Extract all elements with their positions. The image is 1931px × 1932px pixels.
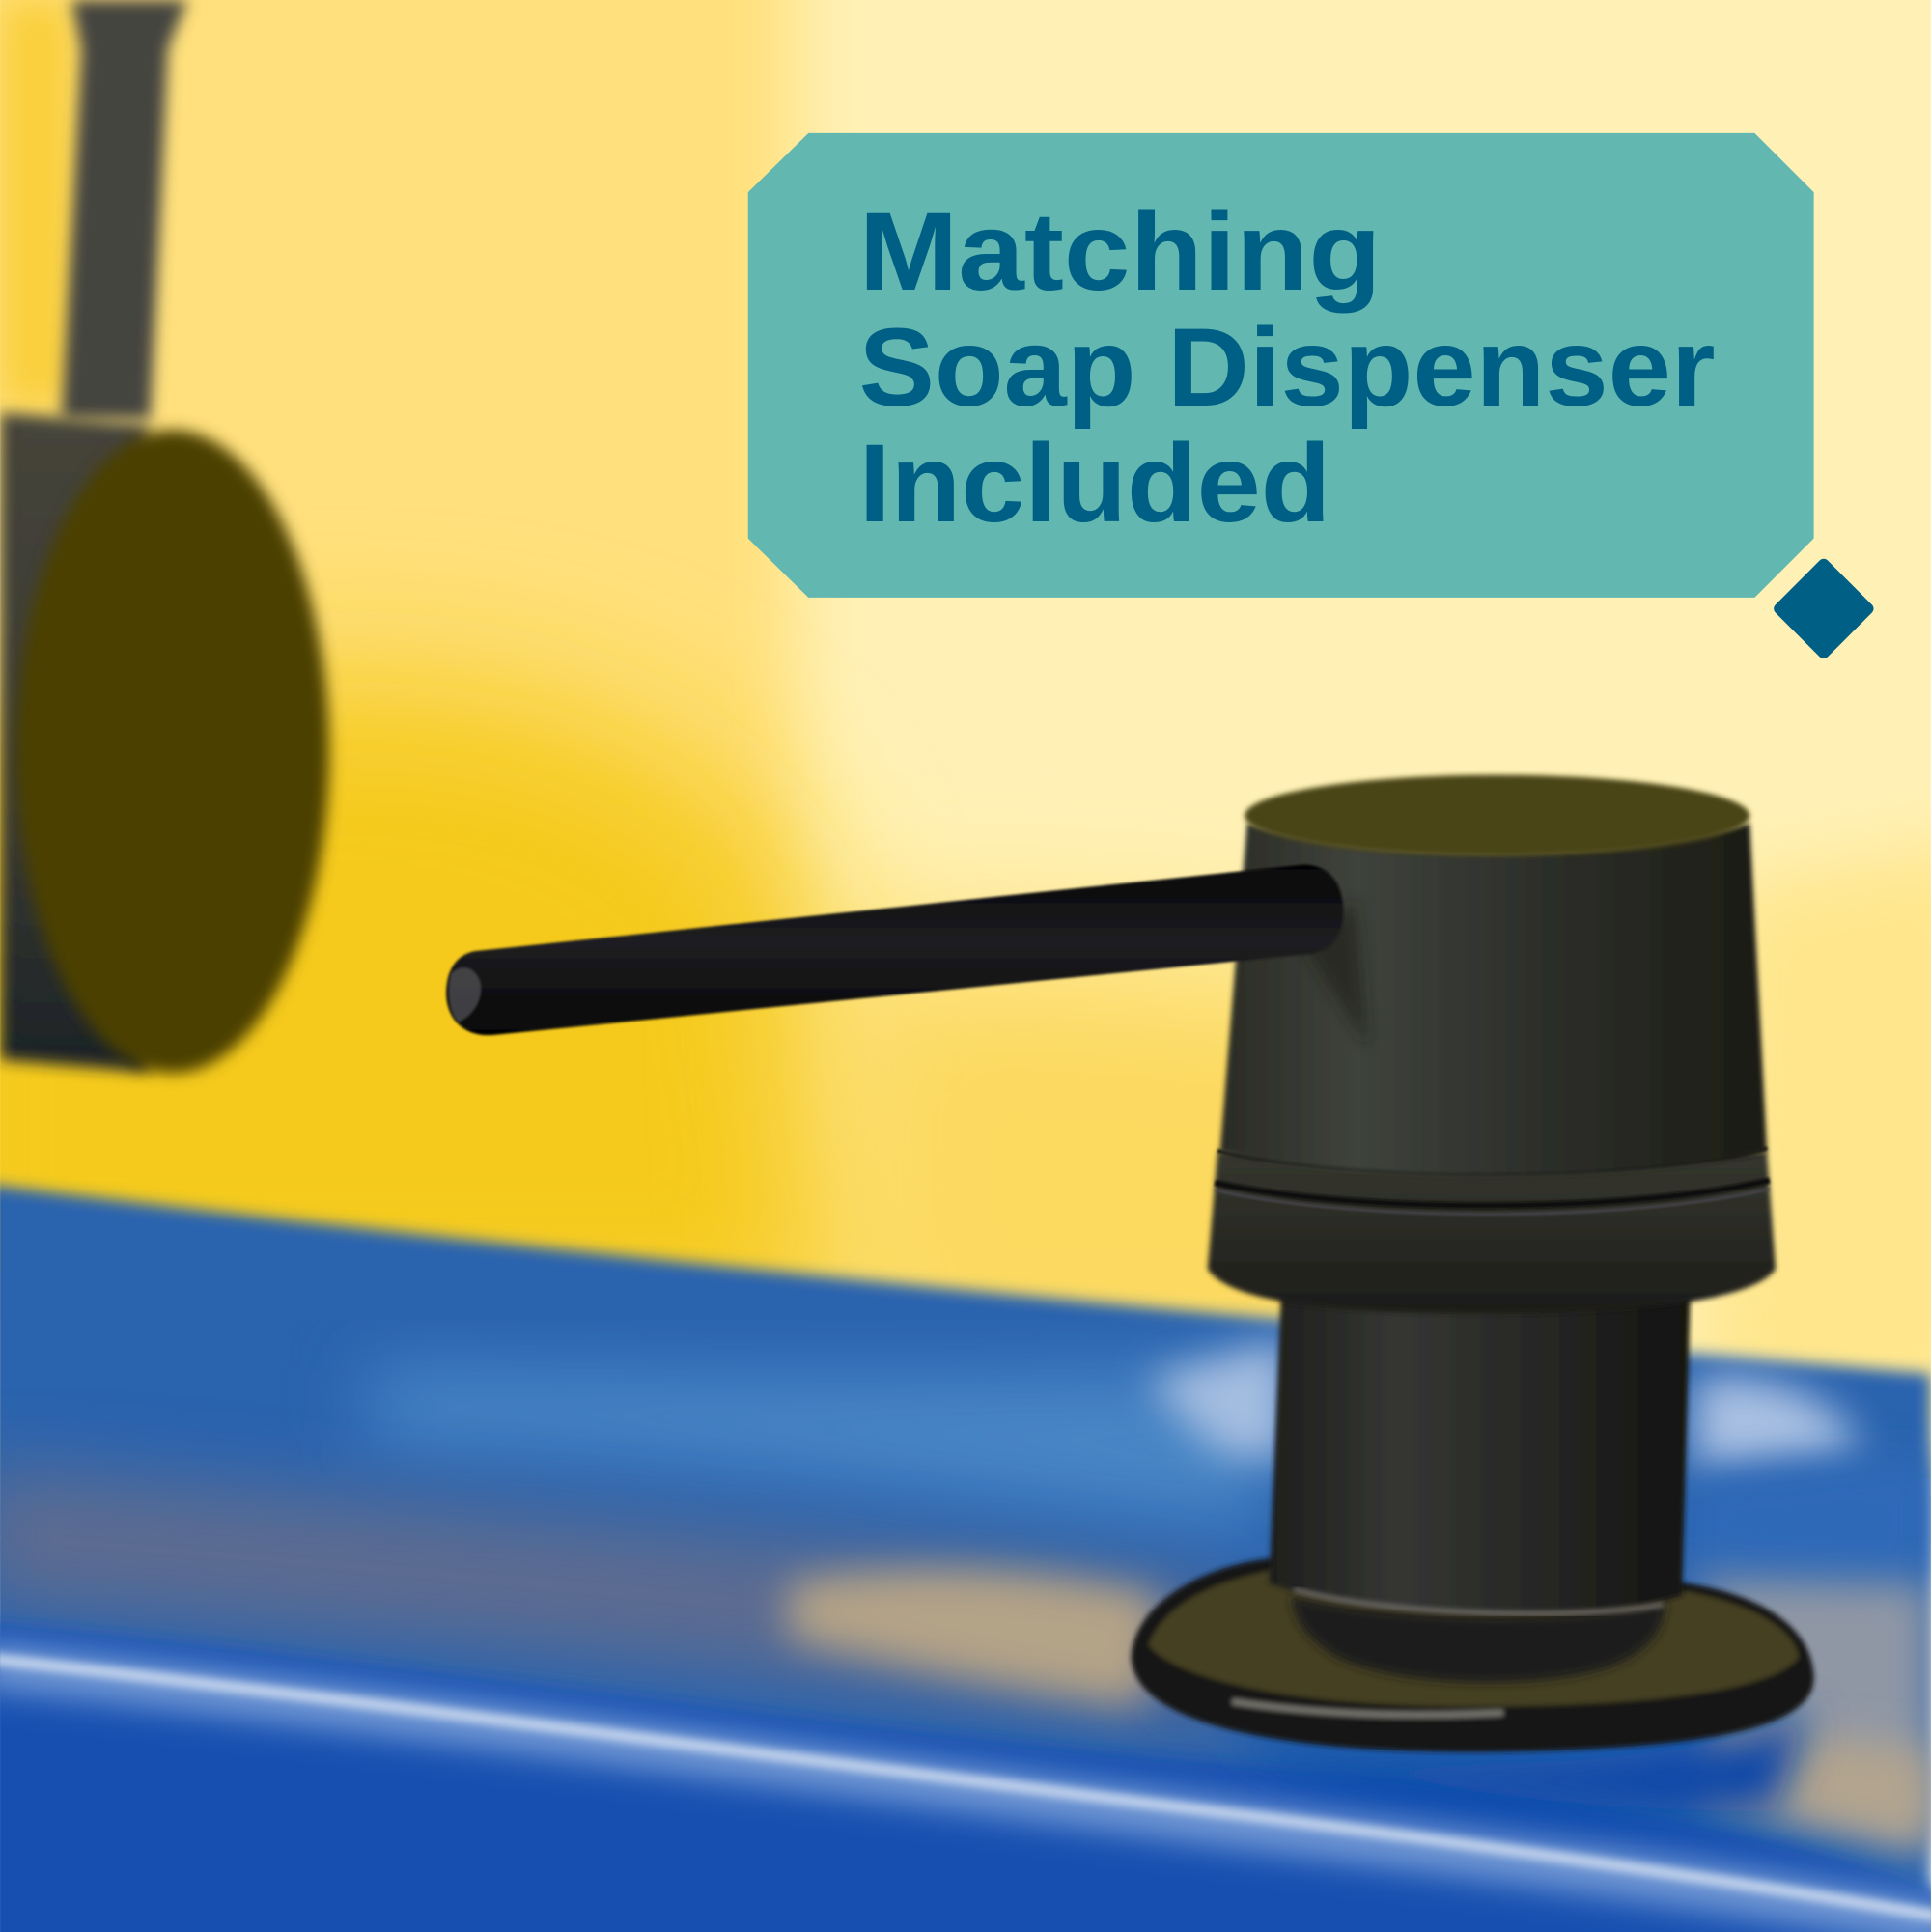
- faucet disc face: [16, 430, 329, 1074]
- callout heading: Matching: [859, 190, 1382, 314]
- dispenser stem: [1270, 1281, 1691, 1614]
- dispenser head: [1220, 823, 1767, 1175]
- sink: grey-beige reflection band: [0, 1467, 1232, 1725]
- lever shadow on head: [1306, 900, 1368, 1048]
- dispenser top: [1245, 775, 1749, 856]
- callout background: [748, 133, 1814, 598]
- dispenser lower collar shadow: [1292, 1596, 1665, 1683]
- dispenser base plate: [1132, 1558, 1814, 1752]
- dispenser collar: [1208, 1152, 1776, 1313]
- soap dispenser: [446, 775, 1814, 1752]
- lever tip highlight: [449, 967, 481, 1022]
- stem ring highlight: [1294, 1589, 1664, 1613]
- callout heading: Soap Dispenser: [859, 306, 1716, 430]
- icon: diamond accent: [1779, 564, 1868, 653]
- lever arm: [446, 865, 1343, 1035]
- faucet body side: [0, 413, 148, 1072]
- callout heading: Included: [859, 422, 1330, 546]
- sink: deep blue lip: [0, 1620, 1931, 1932]
- blurred faucet in background: [0, 0, 329, 1074]
- callout heading: [859, 190, 1716, 546]
- callout panel: [748, 133, 1814, 598]
- faucet stem: [62, 0, 187, 419]
- background: blurred yellow wall: [0, 0, 1931, 1478]
- background: blurred blue sink: [0, 1183, 1931, 1932]
- collar grooves: [1215, 1148, 1770, 1214]
